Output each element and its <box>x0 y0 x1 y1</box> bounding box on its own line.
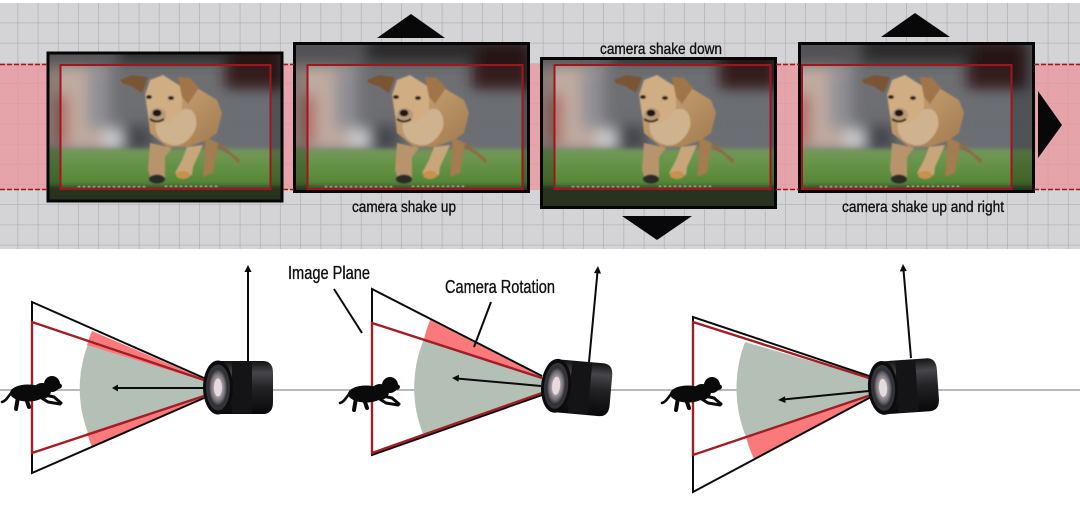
arrow: up axis <box>244 265 252 362</box>
icon: camera lens <box>539 358 613 417</box>
outer field lines <box>693 317 871 492</box>
sector: field of view <box>80 344 204 433</box>
arrow: shake down <box>622 216 692 240</box>
arrow: up axis <box>900 264 911 358</box>
callout: camera rotation: Camera Rotation <box>445 277 555 297</box>
arrow: shake up, frame four <box>881 13 950 37</box>
arrow: optical axis <box>452 375 541 386</box>
stabilised crop band <box>0 64 1080 190</box>
diagram: camera rotated up <box>340 266 613 455</box>
frame: shake up and right <box>798 42 1035 193</box>
icon: monkey <box>340 377 400 410</box>
frame: shake down <box>540 57 777 209</box>
sector: field of view <box>414 339 542 434</box>
band edge dashed lines <box>0 64 1080 190</box>
arrow: optical axis <box>112 384 204 392</box>
outer field lines <box>32 302 204 473</box>
red crop lines <box>693 322 871 455</box>
diagram: camera rotated down <box>662 264 940 492</box>
sector: field of view <box>737 342 871 437</box>
horizon axis <box>0 389 1080 391</box>
callout: image plane: Image Plane <box>288 263 370 283</box>
arrow: up axis <box>589 266 601 362</box>
sector: rotation margin <box>746 395 871 459</box>
panel: camera shake frames on grid <box>0 3 1080 249</box>
outer field lines <box>372 289 542 455</box>
sector: rotation margins <box>87 331 204 447</box>
label: camera shake up: camera shake up <box>352 199 456 216</box>
arrow: optical axis <box>778 391 869 403</box>
arrow: shake up <box>377 14 445 38</box>
arrow: shake right <box>1038 91 1062 158</box>
red crop lines <box>32 322 204 453</box>
frame: shake up <box>293 42 530 193</box>
red crop lines <box>372 323 542 453</box>
icon: camera lens <box>866 357 940 416</box>
grid background <box>0 3 1080 249</box>
frame: no shake <box>46 52 284 202</box>
callout: camera rotation <box>445 277 555 347</box>
diagram: level camera <box>2 265 273 473</box>
icon: monkey <box>2 376 62 409</box>
icon: monkey <box>662 377 722 410</box>
label: camera shake down: camera shake down <box>600 41 722 58</box>
callout: image plane <box>288 263 370 333</box>
icon: camera lens <box>203 360 273 414</box>
label: camera shake up and right: camera shake up and right <box>842 199 1004 216</box>
sector: rotation margin <box>424 320 542 378</box>
